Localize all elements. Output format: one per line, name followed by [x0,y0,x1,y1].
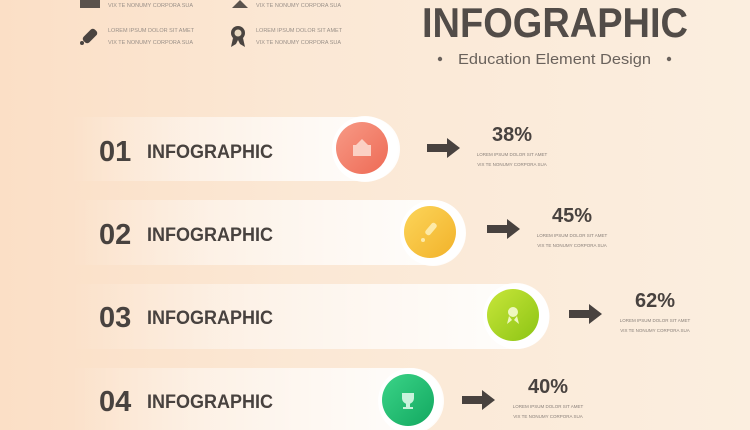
row 1: INFOGRAPHIC [147,142,273,163]
row 2: INFOGRAPHIC [147,225,273,246]
row 4: LOREM IPSUM DOLOR SIT AMET [513,404,583,409]
top legend: VIX TE NONUMY CORPORA SUA [108,40,193,46]
arrow [427,138,460,158]
row 3: LOREM IPSUM DOLOR SIT AMET [620,318,690,323]
row 4: INFOGRAPHIC [147,392,273,413]
icon: medal [231,26,245,47]
row 1 [70,116,547,182]
row 3: 03 [99,302,131,334]
icon: trophy [402,393,414,409]
top legend: VIX TE NONUMY CORPORA SUA [108,3,193,9]
arrow [569,304,602,324]
row 4: VIX TE NONUMY CORPORA SUA [513,414,583,419]
row 2: LOREM IPSUM DOLOR SIT AMET [537,233,607,238]
arrow [487,219,520,239]
row 2: 45% [552,205,592,227]
top legend: LOREM IPSUM DOLOR SIT AMET [108,28,195,34]
icon: pencil [421,222,438,242]
row 2: 02 [99,219,131,251]
top legend: LOREM IPSUM DOLOR SIT AMET [256,28,343,34]
icon: pencil [80,28,98,45]
top legend: VIX TE NONUMY CORPORA SUA [256,3,341,9]
top legend: VIX TE NONUMY CORPORA SUA [256,40,341,46]
row 3: 62% [635,290,675,312]
row 2: VIX TE NONUMY CORPORA SUA [537,243,607,248]
row 1: 38% [492,124,532,146]
row 2 [70,200,607,266]
icon: triangle [232,0,248,8]
title: INFOGRAPHIC [422,0,688,46]
subtitle: Education Element Design [458,51,651,68]
row 3: INFOGRAPHIC [147,308,273,329]
icon: school [353,139,371,156]
row 4: 04 [99,386,131,418]
row 3: VIX TE NONUMY CORPORA SUA [620,328,690,333]
row 1: VIX TE NONUMY CORPORA SUA [477,162,547,167]
row 4 [70,368,583,430]
row 4: 40% [528,376,568,398]
icon: award [507,307,519,324]
icon: building [80,0,100,8]
top legend [80,0,343,47]
arrow [462,390,495,410]
row 3 [70,283,690,349]
row 1: 01 [99,136,131,168]
row 1: LOREM IPSUM DOLOR SIT AMET [477,152,547,157]
